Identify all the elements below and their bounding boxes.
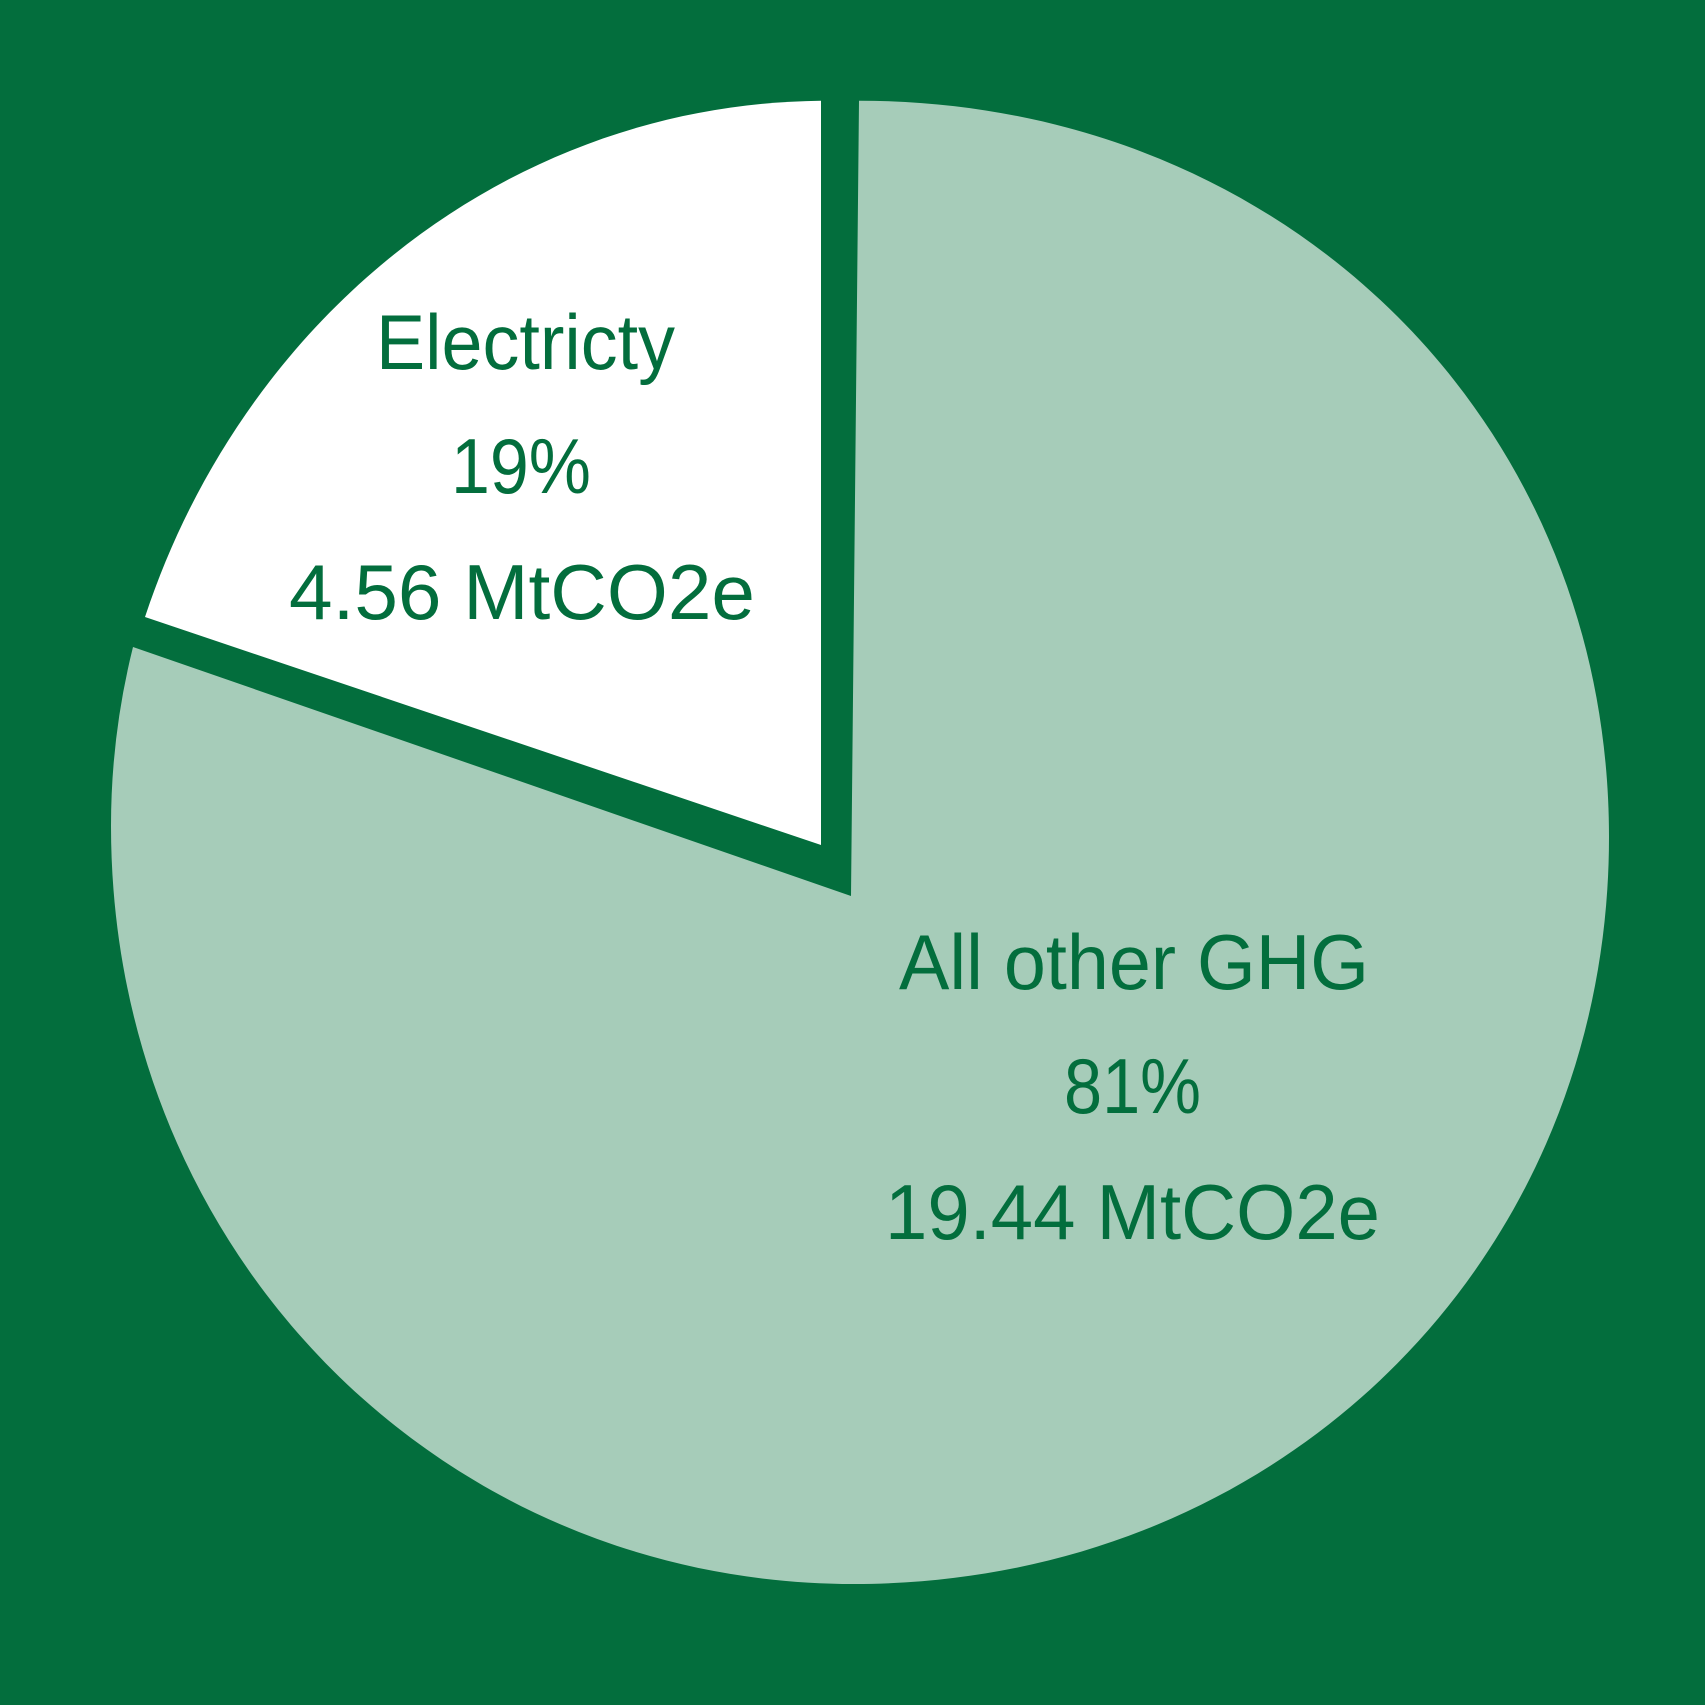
label value: 19.44 MtCO2e: 19.44 MtCO2e	[885, 1168, 1380, 1256]
label value: 4.56 MtCO2e: 4.56 MtCO2e	[289, 548, 755, 636]
slice: electricity 19%	[145, 101, 821, 845]
label percent: 81%: 81%	[1064, 1042, 1201, 1130]
label: electricity	[289, 298, 755, 636]
label name: Electricty: Electricty	[376, 298, 675, 386]
label: all other GHG	[885, 918, 1380, 1256]
label percent: 19%: 19%	[451, 422, 591, 510]
slice: all other GHG 81%	[111, 101, 1609, 1584]
label name: All other GHG: All other GHG	[899, 918, 1369, 1006]
